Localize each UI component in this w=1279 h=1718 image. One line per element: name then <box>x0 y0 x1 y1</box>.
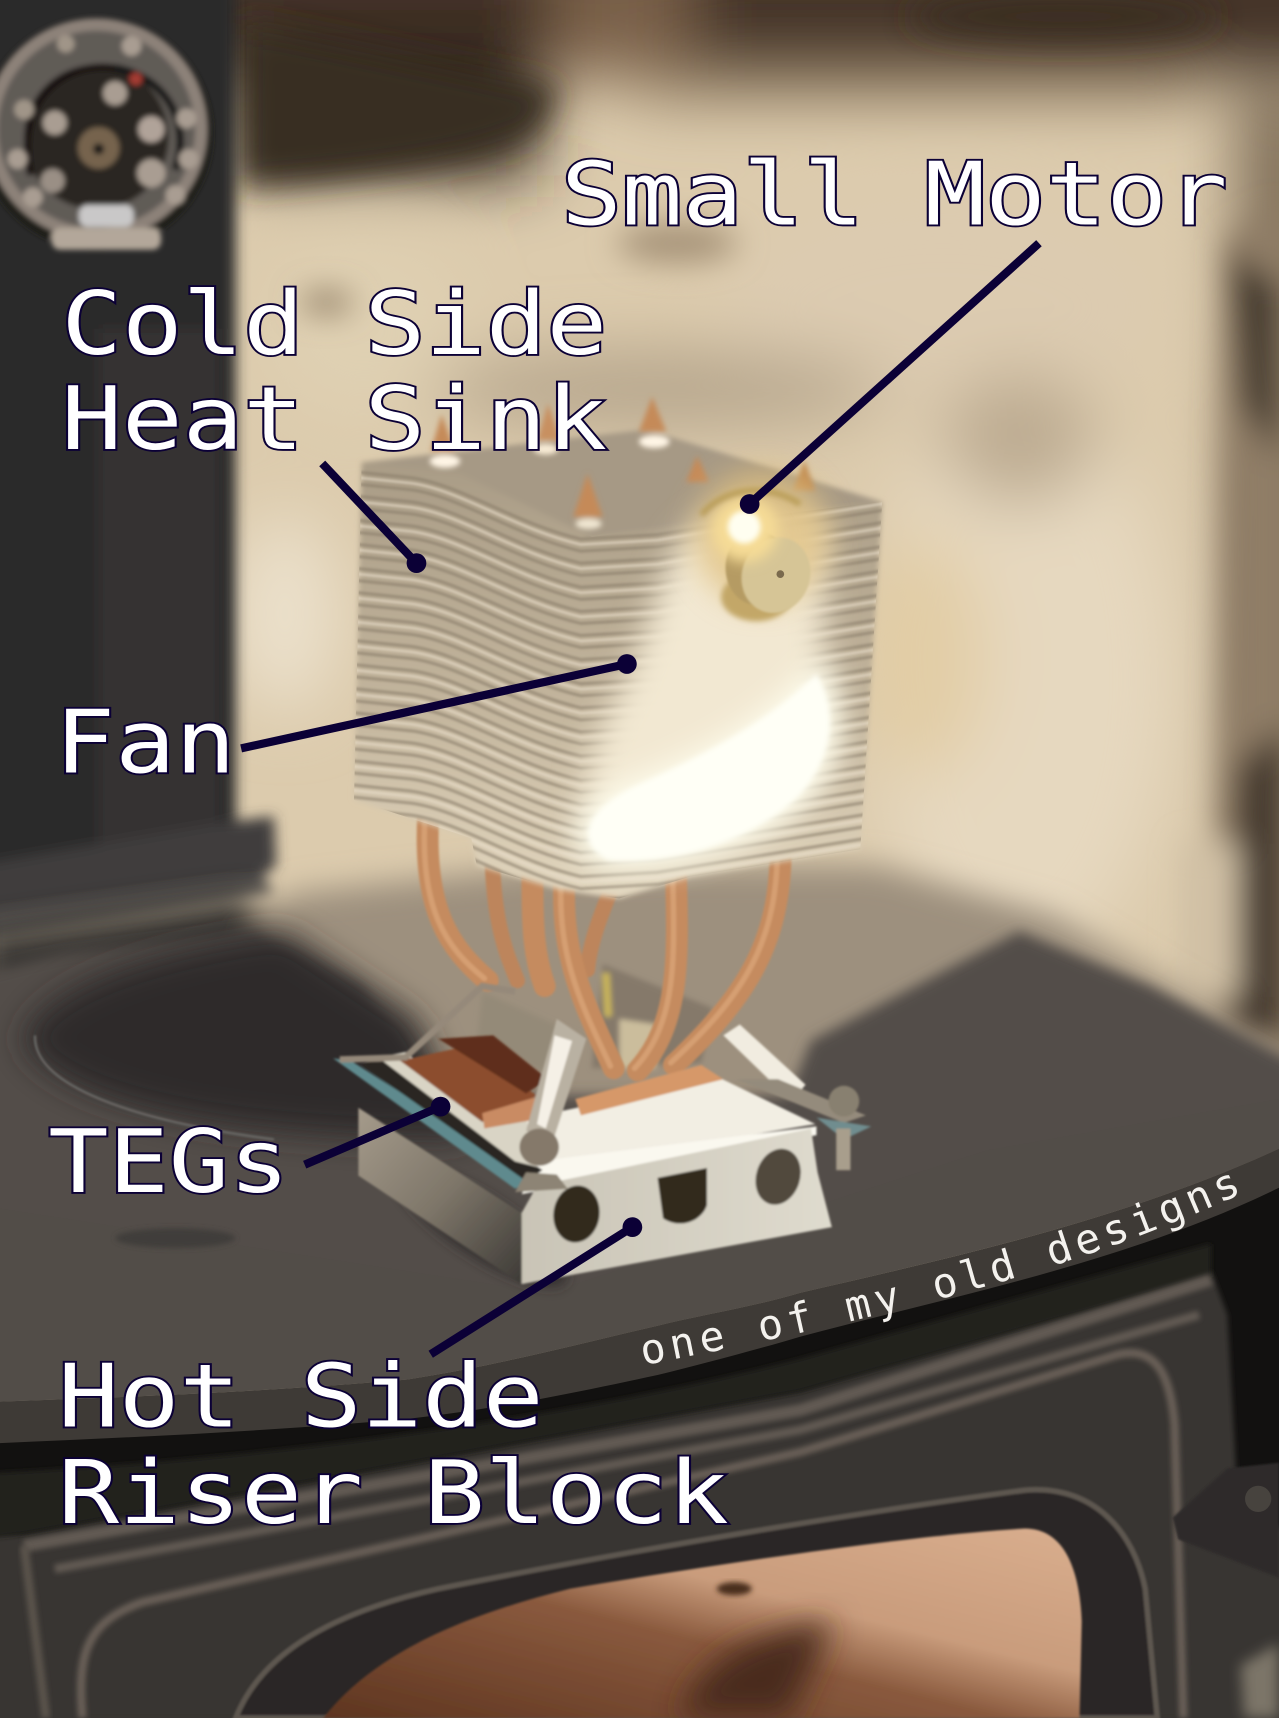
temperature gauge <box>0 18 213 250</box>
riser block and TEG assembly <box>333 986 871 1284</box>
clamp wire left <box>340 986 515 1060</box>
block top slab <box>481 1077 815 1171</box>
stove top surface <box>0 866 1279 1402</box>
callout: TEGs: TEGs <box>48 1111 289 1213</box>
heat sink <box>349 397 888 901</box>
copper heat pipes <box>424 811 781 1070</box>
stove flue pipe <box>0 0 276 942</box>
callout: Hot Side Riser Block: Riser Block <box>58 1442 729 1544</box>
caption: one of my old designs: one of my old designs <box>643 1175 1237 1364</box>
callout: Fan: Fan <box>55 691 236 793</box>
TEG copper plates <box>400 1046 537 1122</box>
callout: TEGs <box>48 1097 450 1213</box>
TEG plate underside <box>378 1052 537 1167</box>
spinning fan blur <box>576 504 837 866</box>
heat pipe tips <box>430 397 815 529</box>
rear hardware behind heat pipes <box>477 964 712 1085</box>
heat sink fin stack <box>354 462 882 898</box>
callout: Cold Side Heat Sink: Cold Side <box>61 273 607 375</box>
heat sink top face <box>362 430 882 537</box>
callout: Small Motor: Small Motor <box>561 144 1227 246</box>
stove body and door frame <box>0 1139 1279 1718</box>
teal base plate <box>333 1058 537 1189</box>
block front face <box>522 1129 832 1284</box>
callout: Cold Side Heat Sink: Heat Sink <box>61 368 607 470</box>
block side face <box>358 1108 522 1284</box>
callout: Hot Side Riser Block: Hot Side <box>58 1346 544 1448</box>
clamp right and screw <box>723 1024 806 1101</box>
clamp tube and bolt <box>526 1019 586 1139</box>
holes in block <box>550 1183 603 1245</box>
callout: Small Motor <box>561 144 1227 514</box>
callout: Hot Side Riser Block <box>58 1217 729 1544</box>
callout: Fan <box>55 654 637 793</box>
callout: Cold Side Heat Sink <box>61 273 607 573</box>
small motor <box>694 469 830 623</box>
